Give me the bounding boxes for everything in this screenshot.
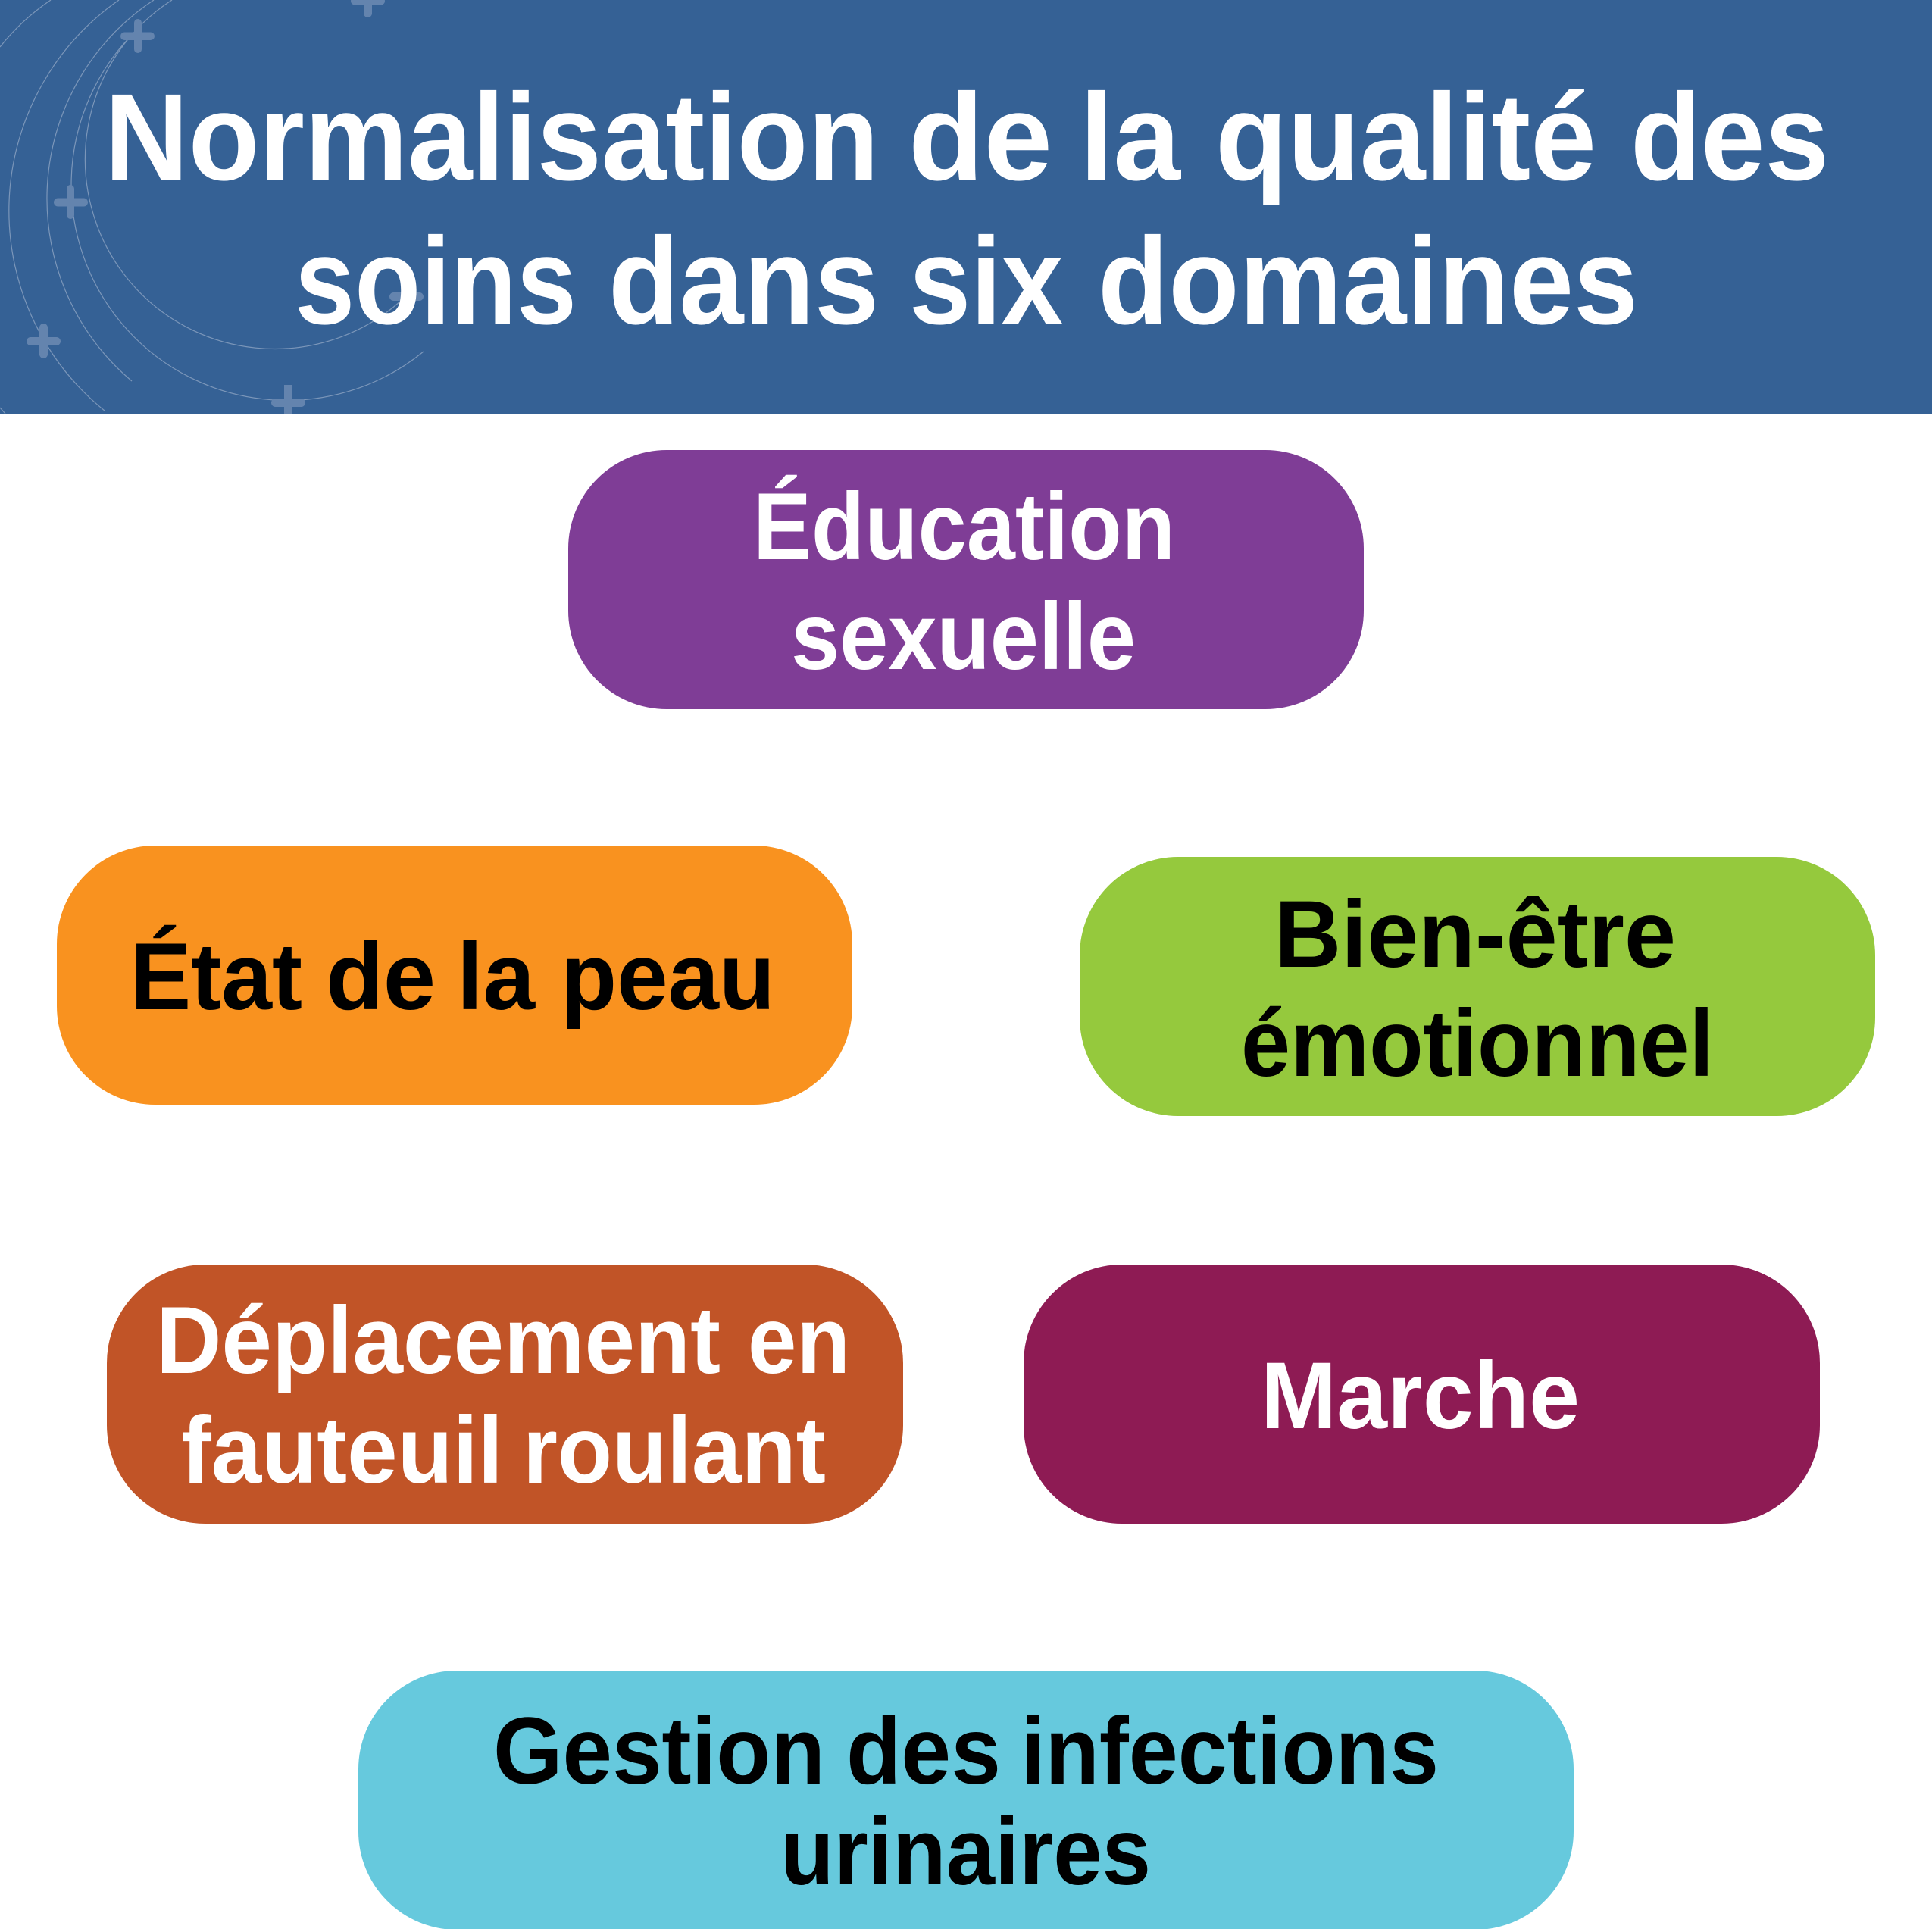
panel: Bien-être émotionnel bbox=[1080, 857, 1875, 1116]
panel: Bien-être émotionnel: Bien-être bbox=[1274, 882, 1676, 987]
title: dans bbox=[608, 211, 879, 350]
title: qualité bbox=[1215, 67, 1596, 206]
panel: Bien-être émotionnel: émotionnel bbox=[1241, 991, 1714, 1096]
panel: Marche bbox=[1024, 1265, 1820, 1524]
panel: Déplacement en fauteuil roulant: fauteuil bbox=[181, 1398, 503, 1503]
panel: État de la peau: État bbox=[130, 924, 302, 1030]
title: Normalisation bbox=[105, 67, 879, 206]
title bbox=[105, 67, 1829, 350]
panel: État de la peau: de bbox=[326, 924, 436, 1030]
panel: Déplacement en fauteuil roulant: roulant bbox=[523, 1398, 826, 1503]
panel: État de la peau bbox=[57, 846, 852, 1105]
panel: Gestion des infections urinaires: des bbox=[846, 1699, 1001, 1804]
title: six bbox=[909, 211, 1063, 350]
title: soins bbox=[295, 211, 577, 350]
header banner bbox=[0, 0, 1932, 414]
icon: plus decorations bbox=[27, 0, 424, 414]
panel: État de la peau: peau bbox=[561, 924, 775, 1030]
panel: Éducation sexuelle bbox=[568, 450, 1364, 709]
panel: Déplacement en fauteuil roulant bbox=[107, 1265, 903, 1524]
title: la bbox=[1080, 67, 1181, 206]
panel: Éducation sexuelle: Éducation bbox=[753, 474, 1175, 580]
panel: Déplacement en fauteuil roulant: en bbox=[748, 1288, 850, 1393]
title: de bbox=[908, 67, 1052, 206]
panel: Gestion des infections urinaires: Gestion bbox=[493, 1699, 825, 1804]
panel: Éducation sexuelle: sexuelle bbox=[791, 584, 1136, 689]
title: des bbox=[1630, 67, 1829, 206]
panel: État de la peau: la bbox=[457, 924, 536, 1030]
title: domaines bbox=[1098, 211, 1638, 350]
panel: Gestion des infections urinaires bbox=[358, 1671, 1574, 1929]
panel: Déplacement en fauteuil roulant: Déplacement bbox=[156, 1288, 721, 1393]
panel: Gestion des infections urinaires: infections bbox=[1021, 1699, 1439, 1804]
panel: Gestion des infections urinaires: urinaires bbox=[780, 1799, 1151, 1905]
panel: Marche: Marche bbox=[1261, 1343, 1580, 1449]
